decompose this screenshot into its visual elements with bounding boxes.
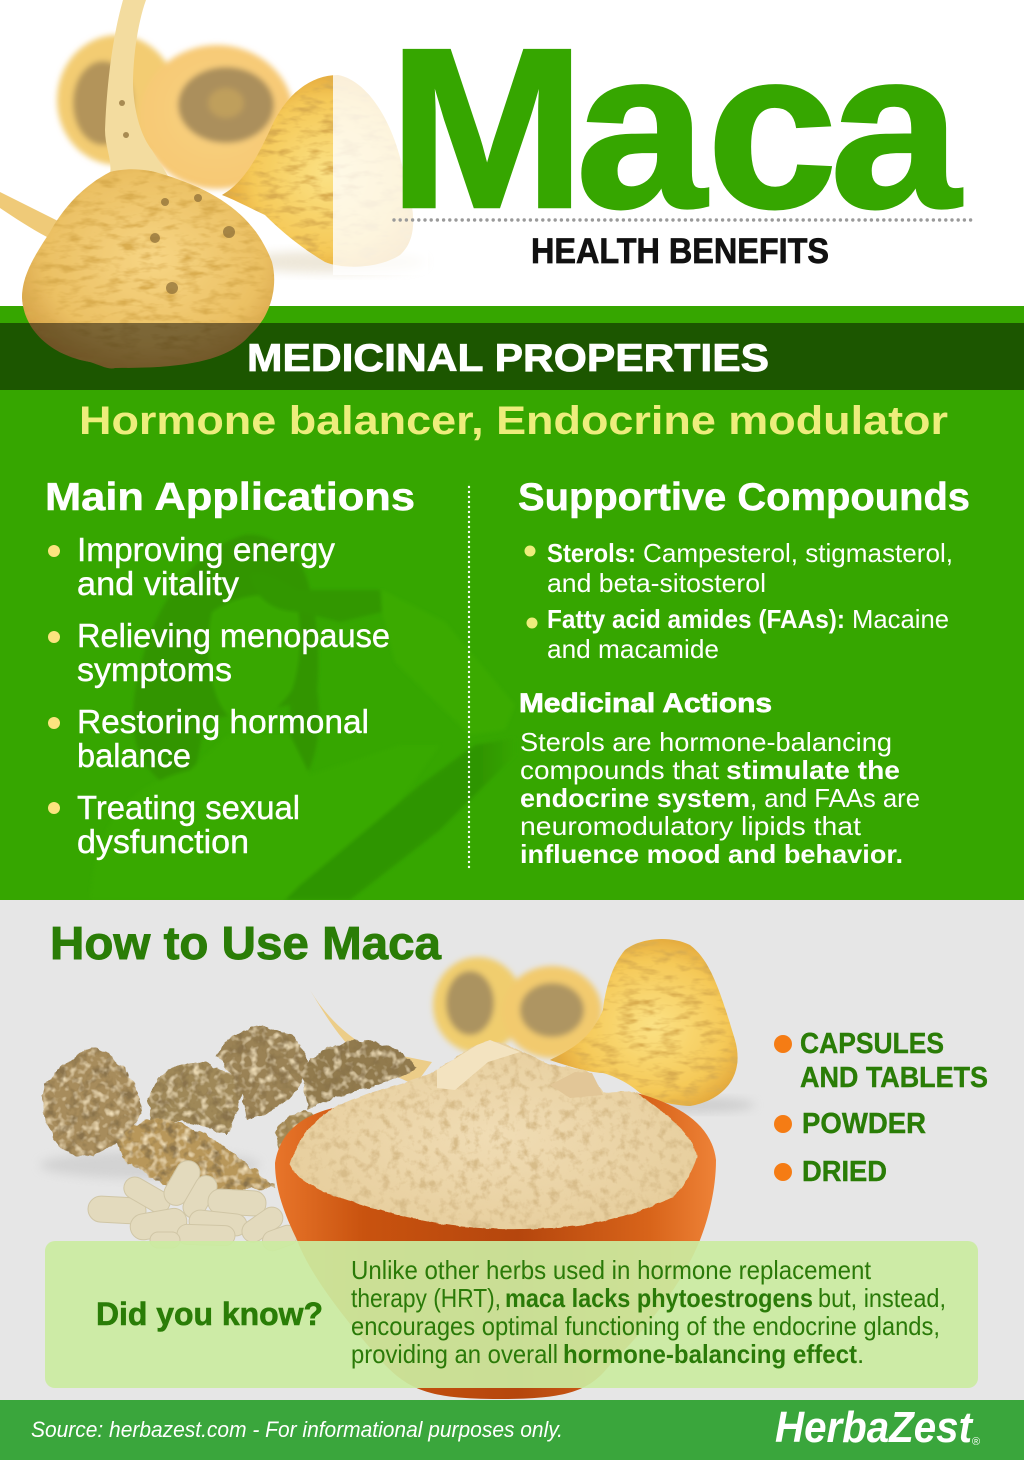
text block: did you know: encourages optimal functioning of the endocrine glands, bbox=[351, 1311, 940, 1341]
text block: medicinal actions: compounds that bbox=[520, 755, 720, 785]
text block: medicinal actions: neuromodulatory lipids that bbox=[520, 811, 862, 841]
heading: Maca: a bbox=[830, 2, 962, 255]
text block: did you know: Unlike other herbs used in hormone replacement bbox=[351, 1255, 872, 1285]
list: forms of maca bbox=[774, 1028, 988, 1188]
list item: restoring hormonal balance bbox=[48, 703, 369, 774]
list item: sterols: Sterols: bbox=[547, 538, 636, 568]
subheading: hormone balancer: Hormone balancer, Endocrine modulator bbox=[79, 399, 948, 443]
footer bbox=[0, 1400, 1024, 1460]
logo: herbazest: HerbaZest bbox=[775, 1403, 974, 1452]
list item: relieving menopause: Relieving menopause bbox=[77, 617, 390, 654]
heading: how to use maca: How to Use Maca bbox=[50, 917, 441, 969]
list item: relieving menopause bbox=[48, 617, 390, 688]
list item: treating sexual dysfunction: Treating sexual bbox=[77, 789, 300, 826]
heading: supportive compounds: Supportive Compounds bbox=[518, 476, 970, 519]
heading: did you know: Did you know? bbox=[96, 1296, 323, 1332]
header background bbox=[0, 0, 1024, 306]
background photo: woman with hand on forehead bbox=[90, 535, 515, 900]
text block: did you know: . bbox=[857, 1339, 864, 1369]
list item: treating sexual dysfunction: dysfunction bbox=[77, 823, 249, 860]
heading: Maca: c bbox=[707, 2, 838, 255]
maca photo: blurred halved roots bbox=[57, 35, 294, 189]
heading: Maca: M bbox=[388, 1, 586, 256]
list item: treating sexual dysfunction bbox=[48, 789, 300, 860]
heading: medicinal properties: MEDICINAL PROPERTIES bbox=[247, 337, 769, 380]
item: powder: POWDER bbox=[802, 1108, 926, 1140]
did you know callout bbox=[45, 1241, 978, 1388]
photo: fresh maca root bbox=[550, 939, 755, 1112]
text block: did you know: maca lacks phytoestrogens bbox=[505, 1283, 813, 1313]
list item: fatty acid amides bbox=[526, 604, 949, 664]
photo: dried maca roots bbox=[40, 990, 432, 1190]
text block: did you know: therapy (HRT), bbox=[351, 1283, 501, 1313]
text block: medicinal actions: Sterols are hormone-balancing bbox=[520, 727, 892, 757]
logo: herbazest: ® bbox=[972, 1436, 980, 1448]
medicinal properties band bbox=[0, 323, 1024, 390]
list item: restoring hormonal balance: Restoring hormonal bbox=[77, 703, 369, 740]
item: dried: DRIED bbox=[802, 1156, 887, 1188]
item: capsules and tablets bbox=[774, 1028, 988, 1094]
list item: fatty acid amides: and macamide bbox=[547, 634, 719, 664]
list item: sterols bbox=[524, 538, 953, 598]
list item: relieving menopause: symptoms bbox=[77, 651, 232, 688]
photo: tablets bbox=[87, 1156, 300, 1254]
list item: sterols: Campesterol, stigmasterol, bbox=[643, 538, 953, 568]
list item: fatty acid amides: Fatty acid amides (FAAs): bbox=[547, 604, 845, 634]
heading: main applications: Main Applications bbox=[45, 476, 415, 519]
text block: did you know: providing an overall bbox=[351, 1339, 558, 1369]
source note: Source: herbazest.com - For informational purposes only. bbox=[31, 1417, 563, 1442]
list item: improving energy bbox=[48, 531, 335, 602]
subtitle: health benefits: HEALTH BENEFITS bbox=[531, 232, 829, 271]
photo: blurred halved roots bbox=[433, 957, 602, 1058]
text block: medicinal actions: stimulate the bbox=[726, 755, 900, 785]
dotted rule bbox=[394, 218, 973, 222]
item: capsules and tablets: CAPSULES bbox=[800, 1028, 944, 1060]
maca root: main bulb with taproot bbox=[0, 0, 274, 368]
list item: improving energy: Improving energy bbox=[77, 531, 335, 568]
list item: fatty acid amides: Macaine bbox=[852, 604, 949, 634]
text block: did you know bbox=[351, 1255, 946, 1369]
column divider bbox=[468, 487, 470, 870]
item: capsules and tablets: AND TABLETS bbox=[800, 1062, 988, 1094]
text block: medicinal actions: , and FAAs are bbox=[750, 783, 920, 813]
list item: improving energy: and vitality bbox=[77, 565, 240, 602]
text block: medicinal actions: influence mood and behavior. bbox=[520, 839, 903, 869]
photo: bowl of maca powder bbox=[275, 1040, 716, 1399]
panel: supportive compounds bbox=[518, 476, 970, 869]
text block: medicinal actions: endocrine system bbox=[520, 783, 750, 813]
panel: main applications bbox=[45, 476, 415, 860]
list item: sterols: and beta-sitosterol bbox=[547, 568, 766, 598]
maca root: pale right bulb bbox=[222, 70, 428, 275]
how to use panel background bbox=[0, 900, 1024, 1400]
heading: Maca: a bbox=[576, 2, 708, 255]
text block: medicinal actions bbox=[520, 727, 920, 869]
list item: restoring hormonal balance: balance bbox=[77, 737, 191, 774]
heading: medicinal actions: Medicinal Actions bbox=[519, 688, 772, 718]
text block: did you know: but, instead, bbox=[818, 1283, 946, 1313]
text block: did you know: hormone-balancing effect bbox=[563, 1339, 857, 1369]
medicinal green panel bbox=[0, 306, 1024, 900]
